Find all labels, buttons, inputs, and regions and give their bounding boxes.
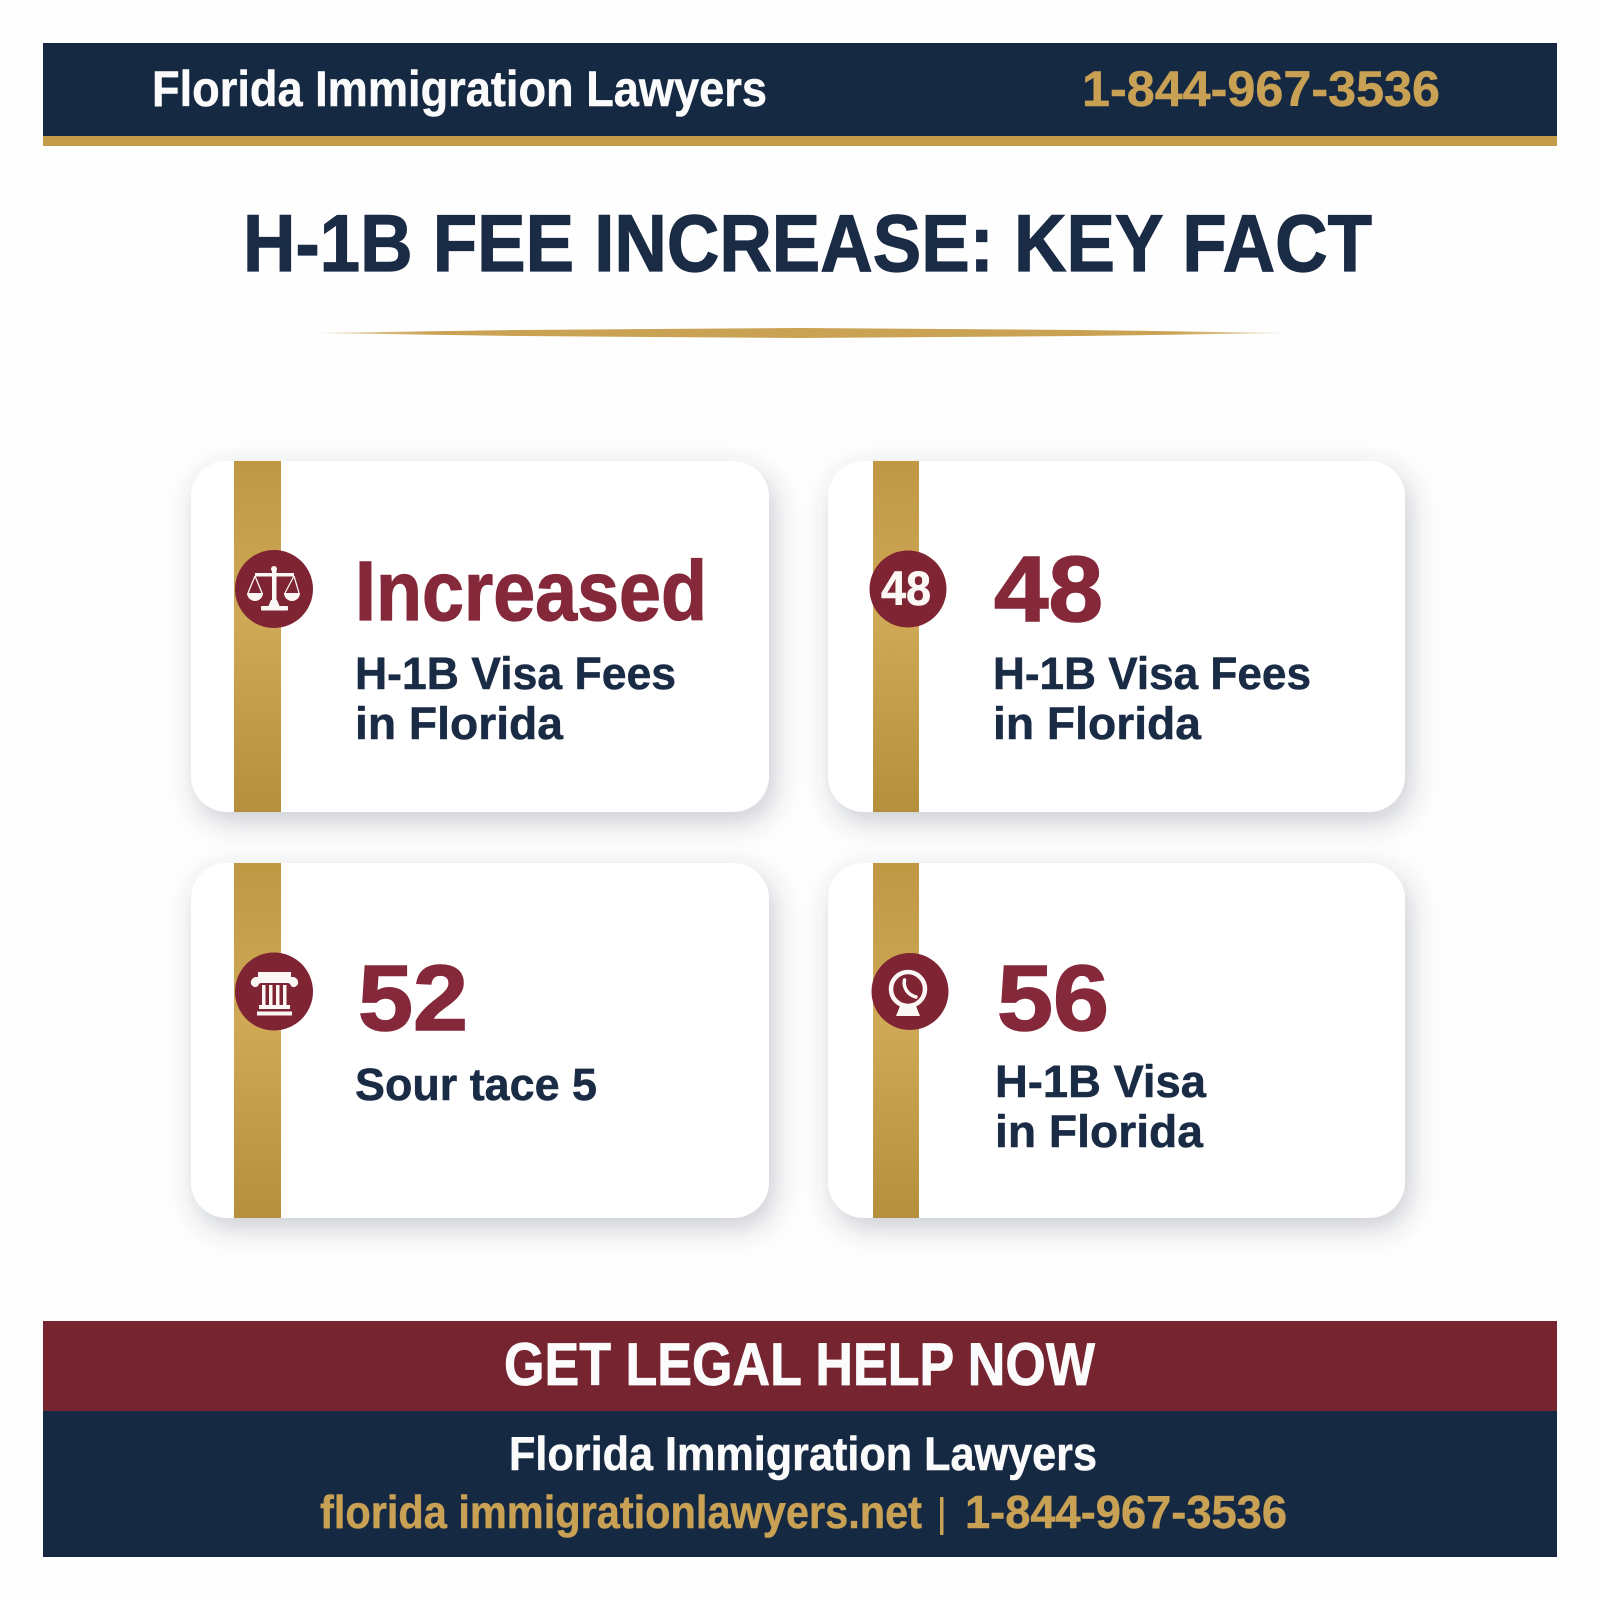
footer firm name: Florida Immigration Lawyers [509, 1427, 1097, 1480]
phone number: 1-844-967-3536 [1082, 61, 1440, 117]
card 2: 48 [828, 461, 1405, 812]
stat: 52: 52 [358, 946, 468, 1050]
description line 2: in Florida [995, 1106, 1204, 1157]
icon: classical column [235, 952, 313, 1030]
title: H-1B FEE INCREASE: KEY FACT [243, 199, 1372, 289]
icon: 48 badge: 48 [881, 563, 931, 616]
description: H-1B Visa Fees [993, 648, 1311, 699]
icon: 48 badge [870, 550, 946, 628]
call to action banner [43, 1321, 1557, 1411]
separator [940, 1497, 944, 1535]
call to action text: GET LEGAL HELP NOW [504, 1331, 1095, 1398]
stat: 48: 48 [994, 537, 1103, 641]
top header band [43, 43, 1557, 146]
card 1: Increased [191, 461, 769, 812]
description: H-1B Visa Fees [355, 648, 676, 699]
title underline [314, 328, 1287, 338]
footer phone number: 1-844-967-3536 [965, 1486, 1287, 1538]
website: florida immigrationlawyers.net [320, 1486, 922, 1538]
card 4: 56 [828, 863, 1405, 1218]
icon: phone in webcam ring [872, 953, 948, 1030]
description: Sour tace 5 [355, 1059, 597, 1110]
description line 2: in Florida [355, 698, 564, 749]
firm name: Florida Immigration Lawyers [152, 61, 767, 117]
card 3: 52 [191, 863, 769, 1218]
description line 2: in Florida [993, 698, 1202, 749]
description: H-1B Visa [995, 1056, 1207, 1107]
icon: scales of justice [235, 550, 313, 628]
stat: 56: 56 [997, 946, 1109, 1050]
footer contact band [43, 1411, 1557, 1557]
stat: Increased: Increased [355, 544, 707, 638]
